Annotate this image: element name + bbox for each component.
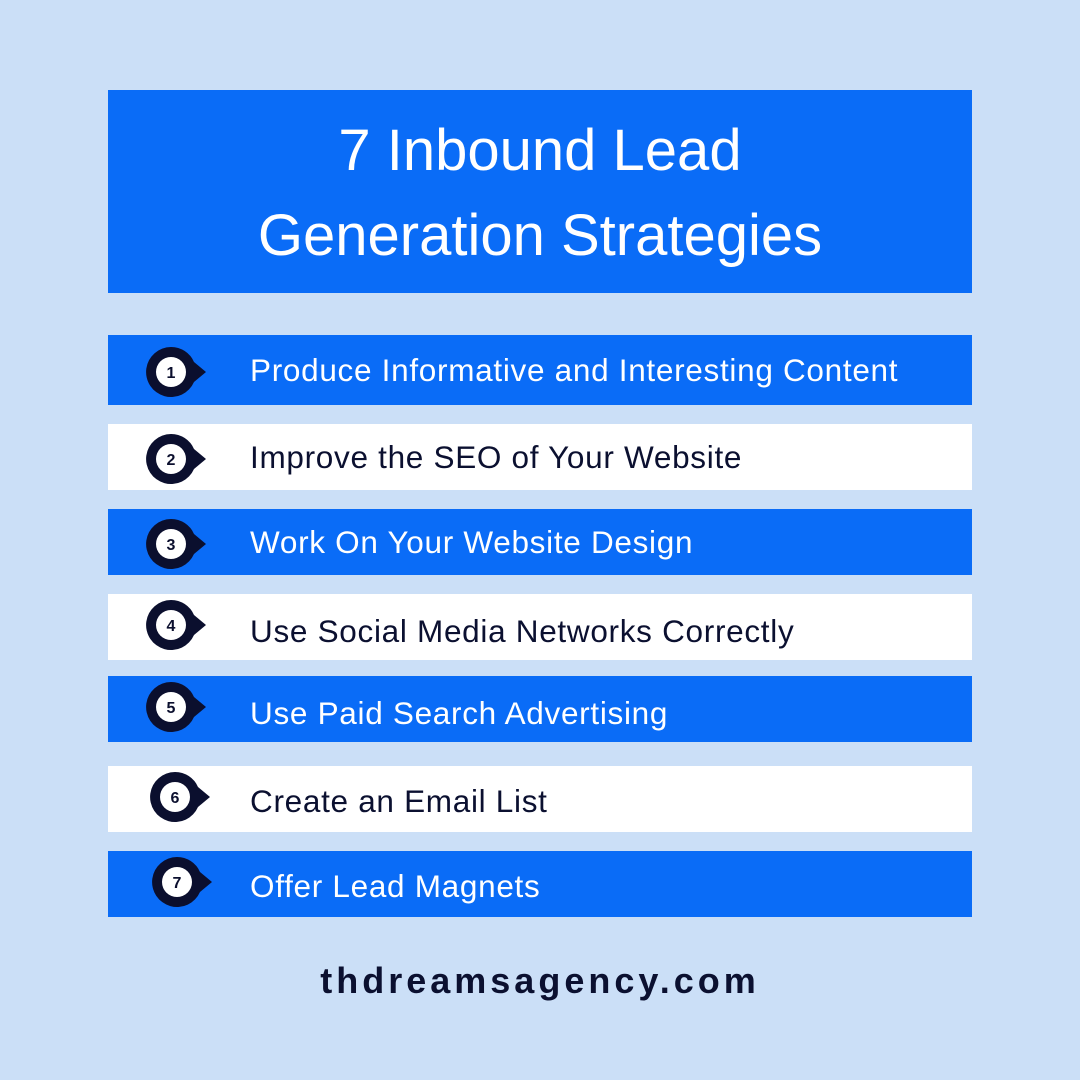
row 6: Create an Email List [250, 783, 548, 819]
row 4: Use Social Media Networks Correctly [250, 613, 794, 649]
row 2 [108, 424, 972, 490]
row 1: Produce Informative and Interesting Content [250, 352, 898, 388]
footer url: thdreamsagency.com [320, 960, 760, 1001]
icon: number 3 [146, 519, 206, 569]
row 7: Offer Lead Magnets [250, 868, 540, 904]
icon: number 5 [146, 682, 206, 732]
icon: number 4 [146, 600, 206, 650]
row 3: Work On Your Website Design [250, 524, 693, 560]
icon: number 4: 4 [167, 618, 176, 635]
icon: number 7 [152, 857, 212, 907]
row 2: Improve the SEO of Your Website [250, 439, 742, 475]
row 6 [108, 766, 972, 832]
title: 7 Inbound Lead [338, 118, 742, 183]
icon: number 2: 2 [167, 452, 176, 469]
icon: number 6: 6 [171, 790, 180, 807]
icon: number 3: 3 [167, 537, 176, 554]
icon: number 1: 1 [167, 365, 176, 382]
row 5: Use Paid Search Advertising [250, 695, 668, 731]
row 3 [108, 509, 972, 575]
row 4 [108, 594, 972, 660]
icon: number 6 [150, 772, 210, 822]
row 5 [108, 676, 972, 742]
row 1 [108, 335, 972, 405]
row 7 [108, 851, 972, 917]
icon: number 5: 5 [167, 700, 176, 717]
title: Generation Strategies [258, 203, 822, 268]
icon: number 7: 7 [173, 875, 182, 892]
icon: number 1 [146, 347, 206, 397]
title [108, 90, 972, 293]
icon: number 2 [146, 434, 206, 484]
